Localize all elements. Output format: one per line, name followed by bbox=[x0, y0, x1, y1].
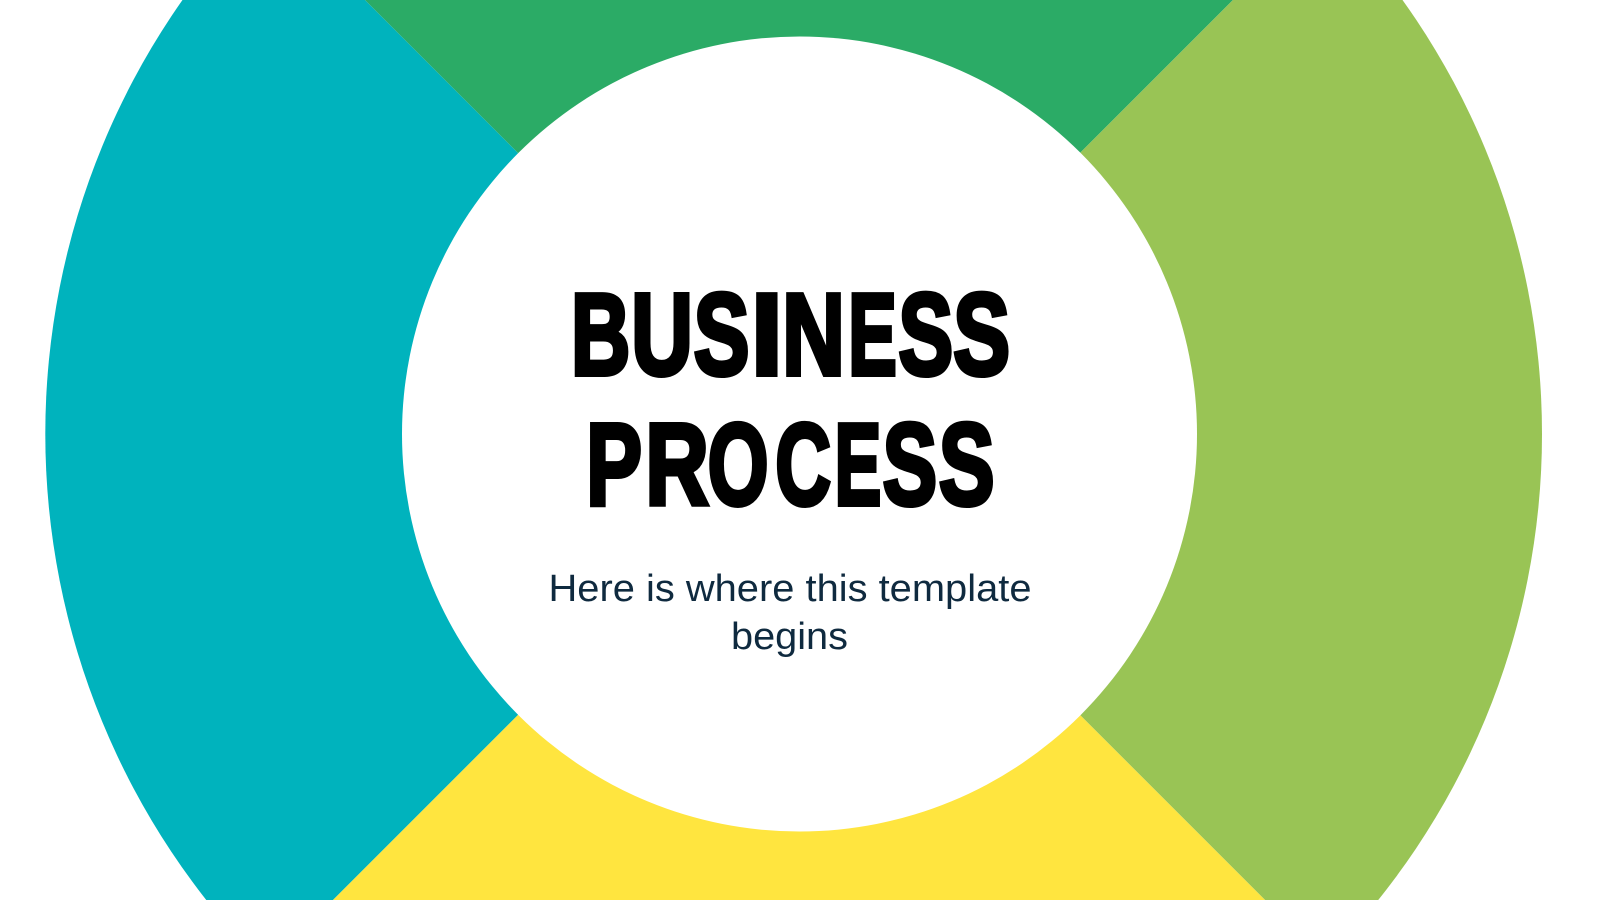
heading bbox=[571, 269, 1010, 529]
heading line 1: N bbox=[782, 269, 845, 399]
subtitle line 2: begins bbox=[731, 616, 848, 658]
heading line 2: S bbox=[883, 399, 937, 529]
ring segment: light green right bbox=[1080, 0, 1542, 900]
heading line 1: S bbox=[898, 269, 953, 399]
heading line 1: U bbox=[631, 269, 693, 399]
center white circle bbox=[402, 36, 1197, 832]
ring segment: teal left bbox=[45, 0, 518, 900]
heading line 2: O bbox=[708, 399, 768, 529]
heading line 1: E bbox=[848, 269, 897, 399]
heading line 1: I bbox=[751, 269, 783, 399]
heading line 1: S bbox=[694, 269, 749, 399]
subtitle bbox=[548, 568, 1032, 658]
heading line 2: S bbox=[939, 399, 994, 529]
heading line 2: P bbox=[586, 399, 642, 529]
heading line 1: B bbox=[571, 269, 630, 399]
subtitle line 1: Here is where this template bbox=[548, 568, 1032, 610]
heading line 2: E bbox=[835, 399, 881, 529]
heading line 1: S bbox=[953, 269, 1010, 399]
ring segment: yellow bottom bbox=[333, 434, 1265, 900]
heading line 2: R bbox=[645, 399, 709, 529]
ring segment: green top bbox=[365, 0, 1233, 434]
heading line 2: C bbox=[775, 399, 831, 529]
